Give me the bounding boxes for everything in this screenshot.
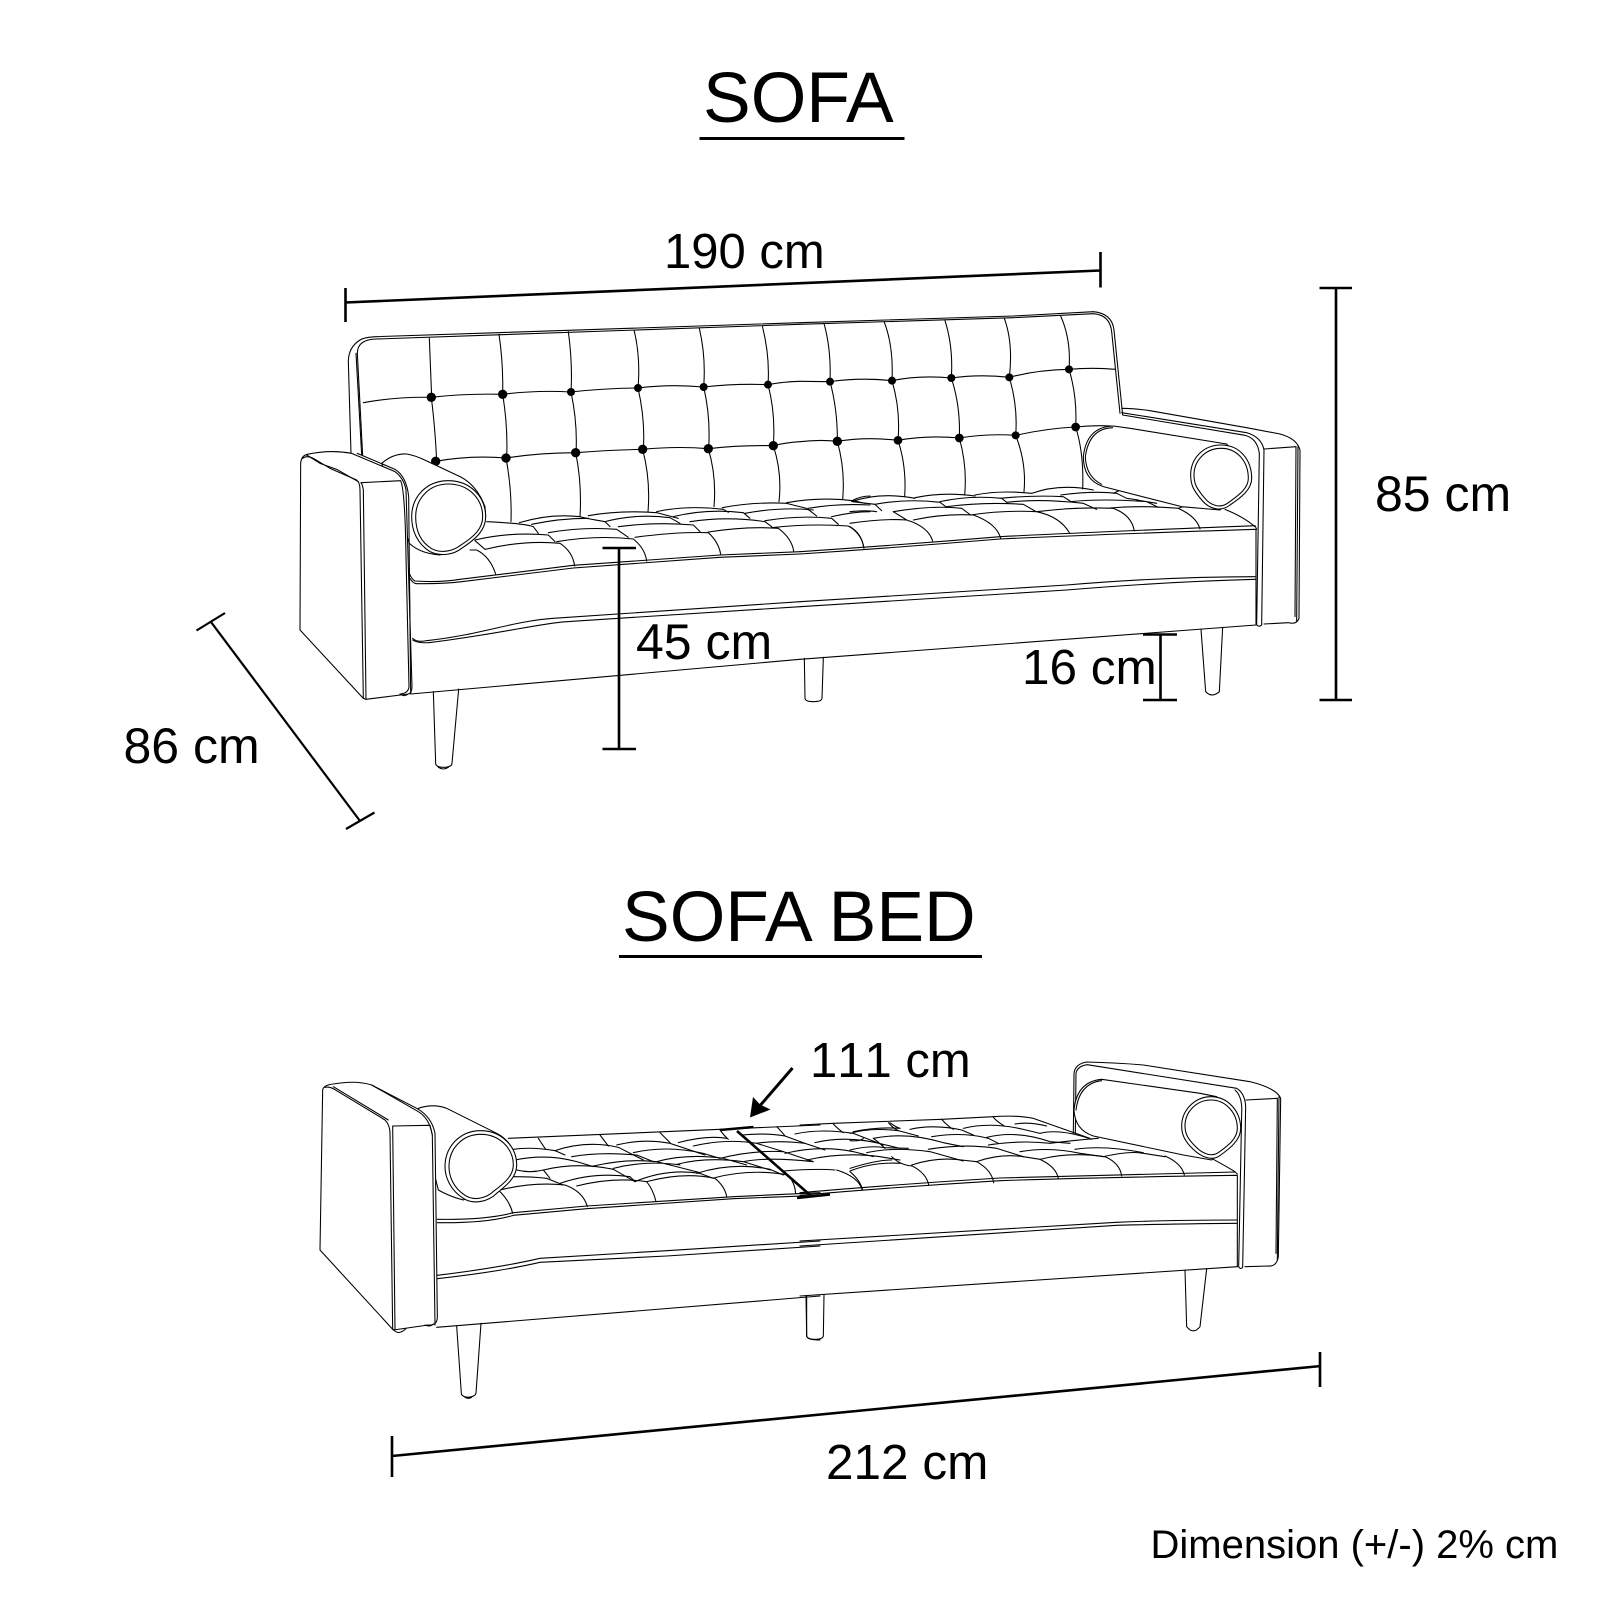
sofa bed flat mattress and base <box>437 1116 1237 1398</box>
sofa bed right arm <box>1073 1062 1281 1269</box>
footnote: dimension tolerance: Dimension (+/-) 2% cm <box>1150 1523 1558 1567</box>
sofa bed left bolster cushion <box>418 1106 517 1202</box>
dimension: 111 cm mattress depth: 111 cm <box>810 1034 971 1088</box>
dimension: 86 cm depth <box>124 613 374 829</box>
dimension: 85 cm height <box>1320 288 1511 700</box>
dimension: 190 cm width <box>346 225 1100 322</box>
sofa seat cushion and base <box>409 487 1257 769</box>
title: SOFA BED: SOFA BED <box>622 877 976 957</box>
dimension: 45 cm seat height <box>602 548 772 749</box>
title: SOFA: SOFA <box>703 58 894 138</box>
dimension: 86 cm depth: 86 cm <box>124 718 260 774</box>
illustration: sofa <box>300 312 1300 769</box>
dimension: 111 cm mattress depth <box>720 1034 971 1198</box>
dimension: 85 cm height: 85 cm <box>1375 466 1511 522</box>
sofa bed right bolster cushion <box>1074 1079 1241 1160</box>
dimension: 190 cm width: 190 cm <box>664 225 825 279</box>
illustration: sofa bed <box>320 1062 1281 1398</box>
dimension: 212 cm length: 212 cm <box>826 1435 988 1490</box>
sofa right bolster cushion <box>1083 426 1252 510</box>
sofa backrest with tufting <box>348 312 1123 522</box>
sofa left bolster cushion <box>382 454 486 555</box>
dimension: 45 cm seat height: 45 cm <box>636 614 772 670</box>
sofa right arm <box>1122 408 1300 626</box>
dimension: 212 cm length <box>392 1352 1321 1490</box>
sofa bed left arm <box>320 1082 437 1333</box>
sofa left arm <box>300 452 412 699</box>
dimension: 16 cm leg height: 16 cm <box>1022 640 1157 695</box>
